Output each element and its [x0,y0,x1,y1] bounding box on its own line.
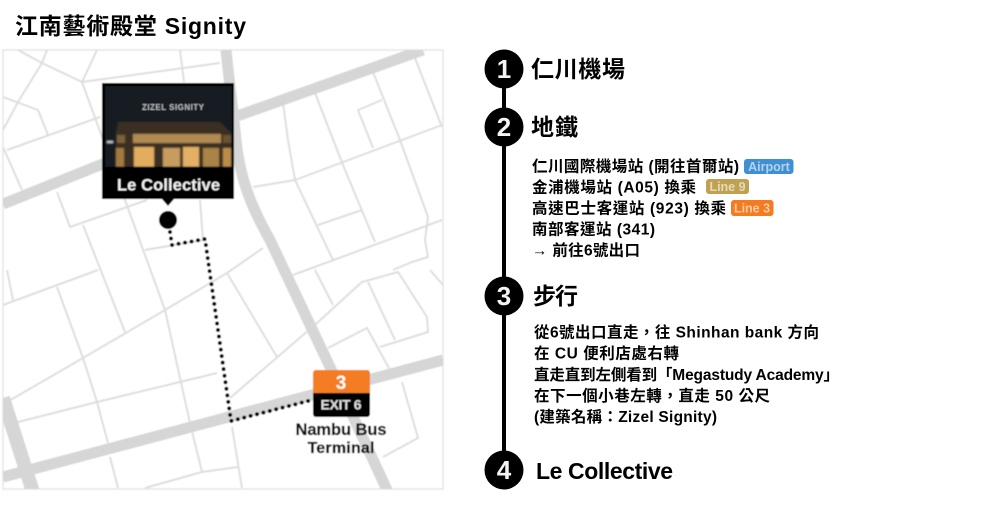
step 3 [484,276,839,426]
route timeline line [502,68,506,470]
step 2 heading: 地鐵 [531,114,578,140]
step 3 directions: 直走直到左側看到「Megastudy Academy」 [534,366,839,384]
step 2 directions: 高速巴士客運站 (923) 換乘 [532,198,726,218]
step 2 directions: 南部客運站 (341) [532,220,655,238]
step 3 directions [534,322,839,426]
station name: Terminal [308,440,374,457]
badge: Line 9: Line 9 [709,180,746,194]
panel: map [3,50,443,492]
station name: Nambu Bus [296,421,386,439]
step 3 directions: 在下一個小巷左轉，直走 50 公尺 [534,386,770,405]
badge: Line 3: Line 3 [734,202,770,216]
step 3 marker: 3 [497,281,511,311]
step 3 marker [484,276,524,316]
destination marker [159,211,177,229]
step 2 marker [484,108,524,146]
walking route [170,232,312,421]
step 4 marker [484,450,524,490]
step 3 directions: 從6號出口直走，往 Shinhan bank 方向 [534,322,819,342]
callout: Le Collective [102,83,234,206]
step 2 directions: 金浦機場站 (A05) 換乘 [532,178,696,196]
exit 6 station badge [313,370,370,417]
title: 江南藝術殿堂 Signity [15,13,246,39]
step 4 heading: Le Collective [536,458,673,484]
map background [3,50,443,489]
callout name: Le Collective [117,176,220,194]
step 2 directions: → 前往6號出口 [532,240,640,260]
step 3 heading: 步行 [533,283,578,309]
step 4 [484,450,673,490]
station name [296,421,386,457]
callout pointer [162,199,174,206]
step 2 [484,108,794,260]
line number: 3 [336,373,346,394]
step 1 [484,50,625,88]
street network [3,50,443,492]
step 2 directions: 仁川國際機場站 (開往首爾站) [532,156,739,176]
building sign: ZIZEL SIGNITY [142,103,205,112]
step 2 marker: 2 [497,112,511,142]
step 3 directions: 在 CU 便利店處右轉 [534,344,679,362]
step 1 marker [484,50,524,88]
step 1 marker: 1 [497,54,511,84]
step 2 directions [532,156,739,260]
step 4 marker: 4 [497,455,512,485]
step 3 directions: (建築名稱：Zizel Signity) [534,407,717,426]
exit label: EXIT 6 [320,396,362,412]
badge: Airport: Airport [748,160,791,174]
callout frame [102,83,234,199]
step 1 heading: 仁川機場 [531,56,625,82]
